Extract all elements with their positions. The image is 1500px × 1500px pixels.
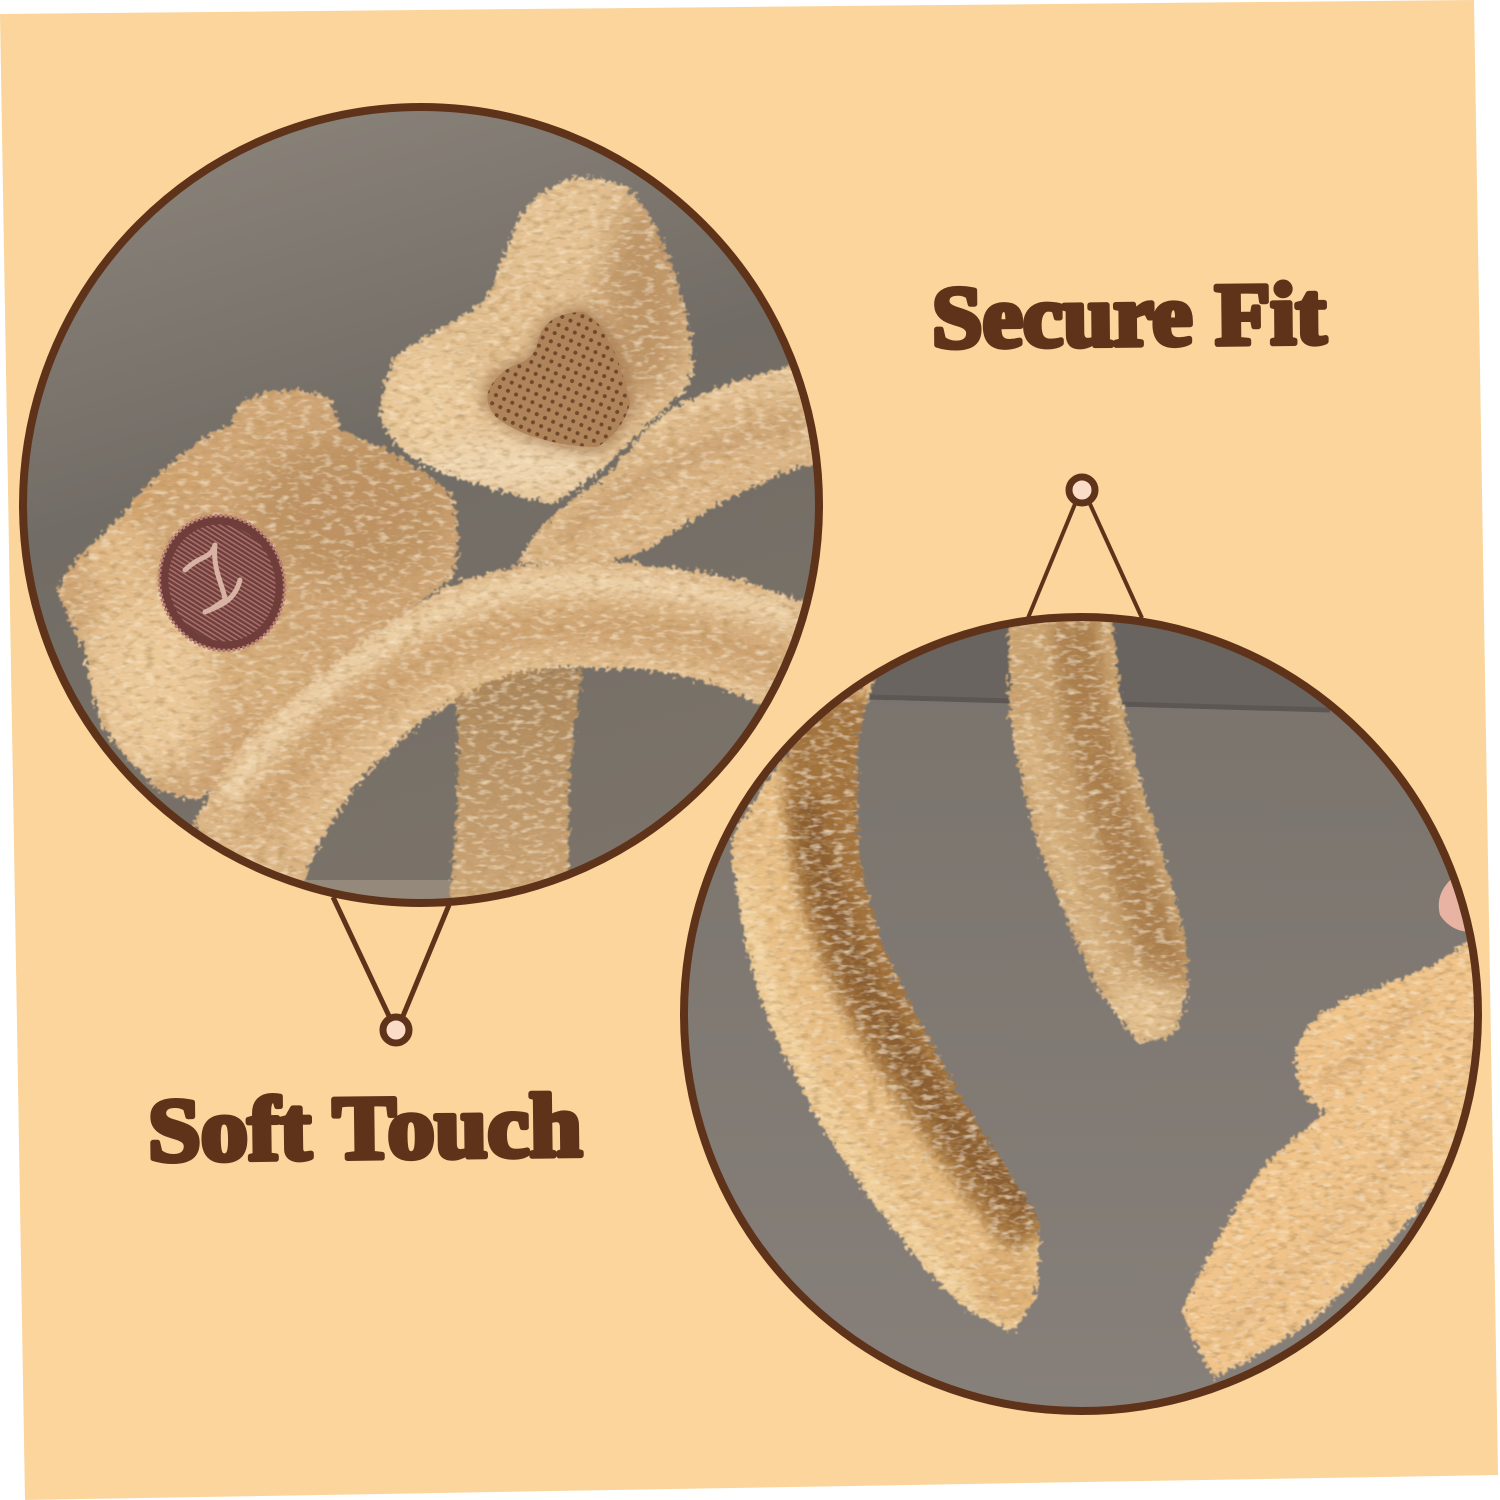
heading: soft touch: Soft Touch	[147, 1076, 583, 1181]
main headband	[193, 561, 815, 892]
bear head	[57, 390, 458, 800]
right ear and band	[1183, 925, 1495, 1378]
tail behind band	[450, 670, 582, 905]
second band	[518, 366, 825, 563]
callout connector: secure fit	[1028, 477, 1142, 618]
pink tip	[1438, 880, 1466, 932]
heart patch	[482, 307, 636, 453]
left ear tail	[731, 680, 1045, 1331]
heading: secure fit: Secure Fit	[931, 266, 1326, 367]
round patch	[158, 514, 286, 652]
callout connector: soft touch	[333, 897, 449, 1043]
middle tail	[1009, 615, 1188, 1044]
panel: secure fit photo circle	[680, 612, 1495, 1418]
panel: soft touch photo circle	[20, 100, 825, 910]
heart ear	[380, 177, 692, 503]
